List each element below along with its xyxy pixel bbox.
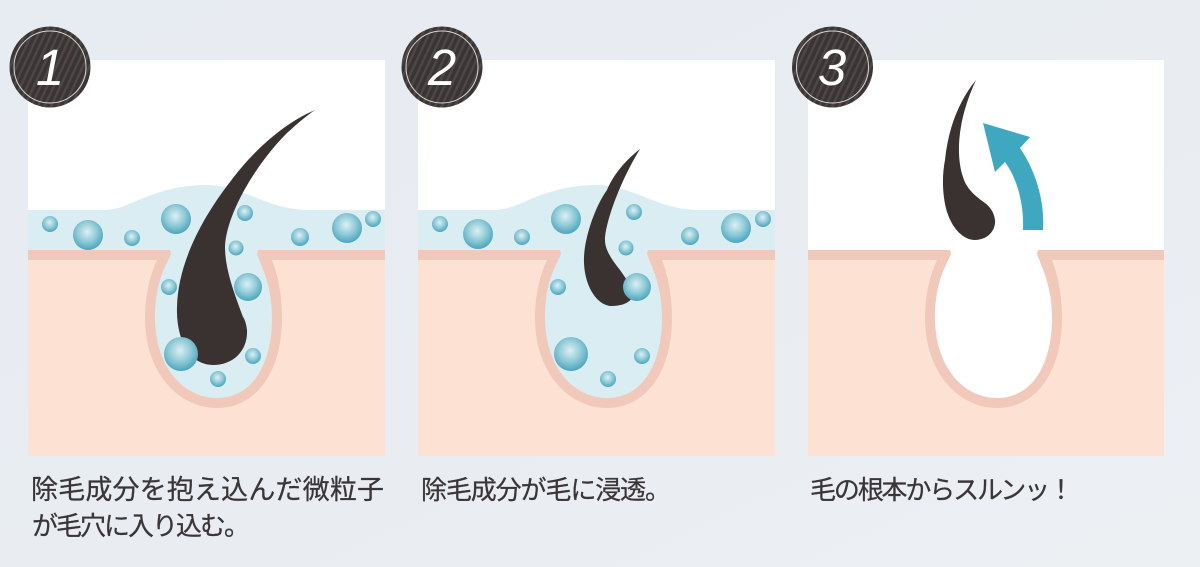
panel 2: bubbles <box>432 204 771 387</box>
badge 1 <box>10 26 90 108</box>
caption 2: 除毛成分が毛に浸透。 <box>421 475 671 505</box>
caption 1 <box>31 475 384 541</box>
panel 1: skin surface and follicle wall <box>28 250 385 408</box>
badge 2 <box>402 26 482 108</box>
panel 2: hair <box>584 149 640 306</box>
caption 1: 除毛成分を抱え込んだ微粒子 <box>31 475 384 505</box>
badge 3 <box>792 26 873 108</box>
panel 1: liquid layer <box>28 185 385 398</box>
panel 2: liquid layer <box>418 185 775 398</box>
badge 1: 1 <box>36 39 64 96</box>
panel 3: empty follicle <box>935 245 1052 398</box>
panel 2: ingredient penetrates the hair <box>418 60 775 456</box>
caption 3: 毛の根本からスルンッ！ <box>810 475 1074 505</box>
panel 2: skin surface and follicle wall <box>418 250 775 408</box>
panel 1: hair <box>177 110 315 365</box>
panel 3: hair slips out <box>808 60 1164 456</box>
panel 1: particles enter the follicle <box>28 60 385 456</box>
badge 3: 3 <box>818 39 846 96</box>
panel 3: skin surface and follicle wall <box>808 250 1164 408</box>
panel 1: bubbles <box>42 204 381 387</box>
badge 2: 2 <box>427 39 456 96</box>
caption 1: が毛穴に入り込む。 <box>32 511 250 541</box>
panel 3: upward arrow <box>983 123 1043 230</box>
panel 3: hair <box>943 80 995 240</box>
